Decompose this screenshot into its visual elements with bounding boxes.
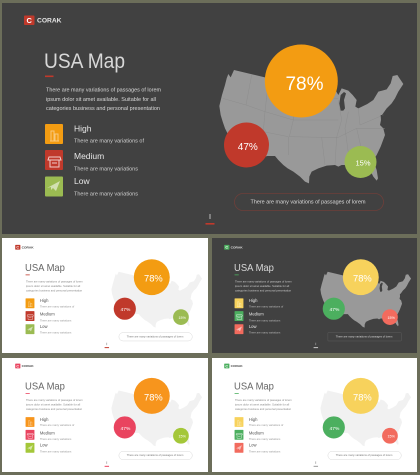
legend: high: High — [249, 417, 258, 422]
logo: C — [16, 364, 19, 368]
page marker — [105, 461, 109, 467]
usa map — [320, 390, 411, 446]
title: USA Map — [25, 263, 65, 274]
legend: medium — [26, 311, 72, 322]
title: USA Map — [234, 381, 274, 392]
intro paragraph: categories business and personal presentation — [46, 106, 160, 112]
intro paragraph: There are many variations of passages of lorem — [46, 88, 161, 94]
callout pill: There are many variations of passages of lorem — [127, 335, 184, 339]
callout pill: There are many variations of passages of lorem — [336, 453, 393, 457]
legend: medium: There are many variations — [249, 318, 281, 322]
bubble: 15%: 15% — [178, 316, 187, 320]
callout pill — [328, 333, 401, 341]
bubble: 47% — [114, 298, 136, 320]
title: USA Map — [25, 381, 65, 392]
intro paragraph: ipsum dolor sit amet available. Suitable for all — [26, 284, 81, 288]
page marker — [206, 214, 214, 225]
bubble: 47%: 47% — [330, 426, 340, 432]
legend: low: Low — [249, 443, 257, 448]
logo — [15, 364, 35, 368]
bubble: 47% — [114, 416, 136, 438]
legend: low: There are many variations — [249, 449, 281, 453]
usa map — [320, 272, 411, 328]
legend: low — [45, 176, 138, 198]
bubble: 78% — [134, 259, 170, 295]
bubble: 15%: 15% — [387, 435, 396, 439]
logo: C — [16, 246, 19, 250]
usa map — [111, 390, 202, 446]
intro paragraph: There are many variations of passages of lorem — [235, 398, 292, 402]
legend: low: Low — [40, 324, 48, 329]
bubble: 78%: 78% — [144, 274, 163, 284]
intro paragraph — [235, 279, 292, 292]
legend: high — [45, 124, 144, 144]
bubble: 15% — [173, 309, 189, 325]
legend: low — [26, 324, 72, 335]
logo: C — [26, 16, 32, 25]
legend: high — [26, 298, 75, 308]
legend: low — [26, 443, 72, 453]
bubble: 15%: 15% — [355, 158, 371, 168]
intro paragraph: There are many variations of passages of lorem — [235, 279, 292, 283]
panel: main dark slide — [2, 3, 417, 234]
title accent — [45, 76, 54, 77]
bubble: 47%: 47% — [121, 307, 131, 313]
logo: CORAK — [22, 245, 35, 249]
page marker — [105, 343, 109, 348]
logo — [15, 245, 35, 250]
intro paragraph — [46, 88, 161, 112]
bubble: 15%: 15% — [387, 316, 396, 320]
intro paragraph — [26, 279, 83, 292]
legend: medium — [235, 311, 281, 322]
panel: light slide red theme — [2, 238, 208, 353]
panel: light slide yellow theme — [212, 358, 417, 472]
callout pill: There are many variations of passages of lorem — [127, 453, 184, 457]
legend: low: Low — [249, 324, 257, 329]
bubble: 78%: 78% — [285, 74, 324, 95]
logo: CORAK — [37, 18, 62, 24]
panel: light slide pink theme — [2, 358, 208, 472]
bubble: 47% — [323, 416, 345, 438]
legend: medium: Medium — [40, 312, 55, 317]
bubble: 47%: 47% — [238, 142, 258, 153]
intro paragraph: ipsum dolor sit amet available. Suitable for all — [235, 403, 290, 407]
intro paragraph: ipsum dolor sit amet available. Suitable for all — [46, 97, 156, 103]
bubble: 47% — [224, 122, 269, 168]
legend: low — [235, 324, 281, 335]
callout pill — [328, 451, 401, 460]
intro paragraph: There are many variations of passages of lorem — [26, 398, 83, 402]
intro paragraph: categories business and personal presentation — [235, 407, 292, 411]
bubble: 15% — [382, 428, 398, 444]
legend: high: High — [249, 298, 258, 303]
title: USA Map — [234, 263, 274, 274]
bubble: 15% — [344, 146, 376, 178]
bubble: 78% — [343, 259, 379, 295]
logo: CORAK — [22, 364, 35, 368]
intro paragraph — [26, 398, 83, 411]
legend: high: There are many variations of — [249, 423, 284, 427]
intro paragraph: There are many variations of passages of lorem — [26, 279, 83, 283]
title accent — [235, 392, 239, 395]
legend: medium — [26, 430, 72, 441]
bubble: 47%: 47% — [330, 307, 340, 313]
legend: medium: Medium — [249, 312, 264, 317]
intro paragraph — [235, 398, 292, 411]
usa map — [219, 70, 403, 183]
legend: low: There are many variations — [40, 331, 72, 335]
callout pill — [234, 194, 384, 210]
legend: low — [235, 443, 281, 453]
legend: high: There are many variations of — [249, 304, 284, 308]
legend: medium: There are many variations — [40, 437, 72, 441]
bubble: 15%: 15% — [178, 435, 187, 439]
page marker — [314, 461, 318, 467]
intro paragraph: ipsum dolor sit amet available. Suitable for all — [26, 403, 81, 407]
bubble: 78% — [265, 44, 338, 118]
intro paragraph: categories business and personal presentation — [235, 288, 292, 292]
legend: medium: There are many variations — [74, 166, 138, 172]
title accent — [26, 392, 30, 395]
title accent — [26, 273, 30, 276]
logo: C — [225, 246, 228, 250]
legend: high: There are many variations of — [74, 138, 144, 144]
legend: low: There are many variations — [249, 331, 281, 335]
logo: CORAK — [231, 245, 244, 249]
legend: low: Low — [40, 443, 48, 448]
bubble: 78%: 78% — [353, 392, 372, 402]
legend: high: High — [40, 298, 49, 303]
bubble: 47% — [323, 298, 345, 320]
legend: low: There are many variations — [40, 449, 72, 453]
intro paragraph: categories business and personal presentation — [26, 407, 83, 411]
callout pill: There are many variations of passages of lorem — [336, 335, 393, 339]
title accent — [235, 273, 239, 276]
bubble: 78% — [343, 378, 379, 414]
bubble: 47%: 47% — [121, 426, 131, 432]
usa map — [111, 272, 202, 328]
legend: high — [235, 298, 284, 308]
legend: medium: Medium — [249, 430, 264, 435]
logo — [224, 364, 244, 368]
callout pill — [119, 451, 192, 460]
bubble: 15% — [173, 428, 189, 444]
legend: medium: There are many variations — [249, 437, 281, 441]
legend: medium — [45, 150, 138, 172]
logo: CORAK — [231, 364, 244, 368]
page marker — [314, 343, 318, 348]
logo — [24, 16, 62, 25]
legend: medium: Medium — [40, 430, 55, 435]
legend: low: There are many variations — [74, 192, 138, 198]
legend: high — [26, 417, 75, 427]
legend: high — [235, 417, 284, 427]
bubble: 78%: 78% — [353, 274, 372, 284]
panel: dark slide green theme — [212, 238, 417, 353]
legend: medium — [235, 430, 281, 441]
logo — [224, 245, 244, 250]
legend: low: Low — [74, 176, 90, 186]
legend: medium: Medium — [74, 151, 104, 161]
bubble: 15% — [382, 309, 398, 325]
bubble: 78%: 78% — [144, 392, 163, 402]
legend: medium: There are many variations — [40, 318, 72, 322]
callout pill — [119, 333, 192, 341]
legend: high: High — [40, 417, 49, 422]
title: USA Map — [44, 50, 125, 73]
callout pill: There are many variations of passages of lorem — [250, 200, 366, 206]
logo: C — [225, 364, 228, 368]
bubble: 78% — [134, 378, 170, 414]
intro paragraph: categories business and personal presentation — [26, 288, 83, 292]
legend: high: High — [74, 124, 92, 134]
legend: high: There are many variations of — [40, 304, 75, 308]
intro paragraph: ipsum dolor sit amet available. Suitable for all — [235, 284, 290, 288]
legend: high: There are many variations of — [40, 423, 75, 427]
